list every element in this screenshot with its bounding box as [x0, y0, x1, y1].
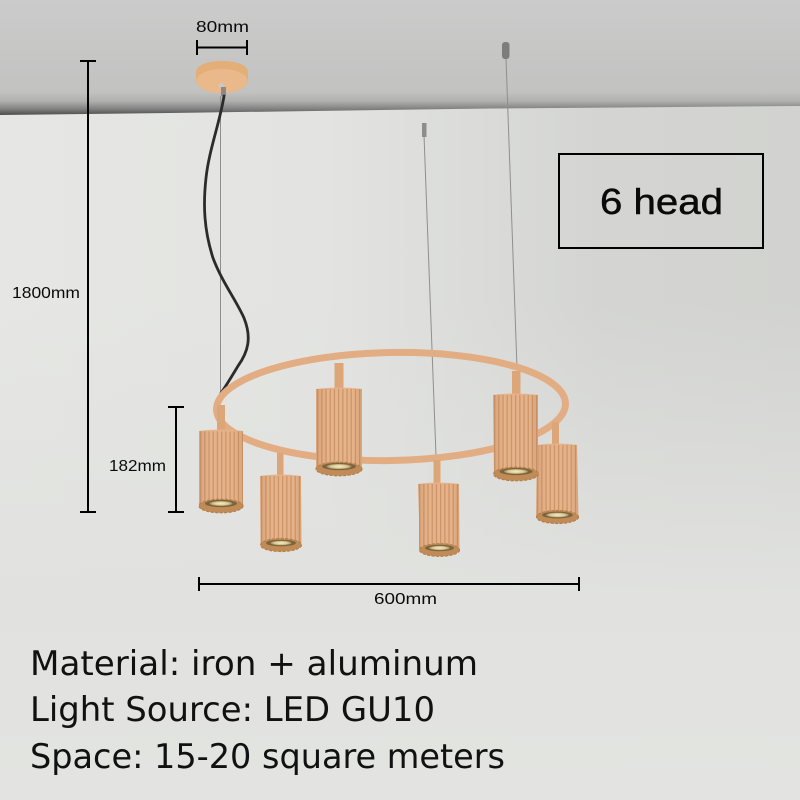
dimension: 182mm: 182mm: [109, 458, 166, 475]
lamp head 3: [316, 363, 362, 476]
suspension wires: [220, 42, 517, 456]
wire clip right: [502, 42, 510, 59]
badge: 6 head: 6 head: [600, 181, 723, 222]
dimension: 80mm: [196, 19, 249, 55]
specifications text: [30, 644, 505, 777]
lamp head 2: [260, 453, 302, 552]
lamp head 5: [493, 371, 538, 481]
specifications text: Space: 15-20 square meters: [30, 737, 505, 777]
lamp head 1: [199, 405, 243, 513]
lamp ring: [216, 349, 566, 464]
dimension: 80mm: 80mm: [196, 19, 249, 36]
dimension: 600mm: [199, 577, 579, 608]
badge: 6 head: [559, 154, 763, 248]
specifications text: Material: iron + aluminum: [30, 644, 478, 684]
background: ceiling: [0, 0, 800, 115]
power cable: [204, 96, 248, 393]
dimension: 182mm: [109, 407, 184, 512]
ceiling canopy: [196, 61, 248, 96]
wire clip left: [422, 123, 426, 137]
dimension: 1800mm: 1800mm: [12, 285, 80, 302]
dimension: 600mm: 600mm: [374, 591, 437, 608]
dimension: 1800mm: [12, 61, 96, 512]
specifications text: Light Source: LED GU10: [30, 690, 435, 730]
lamp head 6: [536, 422, 578, 524]
lamp head 4: [418, 460, 460, 556]
